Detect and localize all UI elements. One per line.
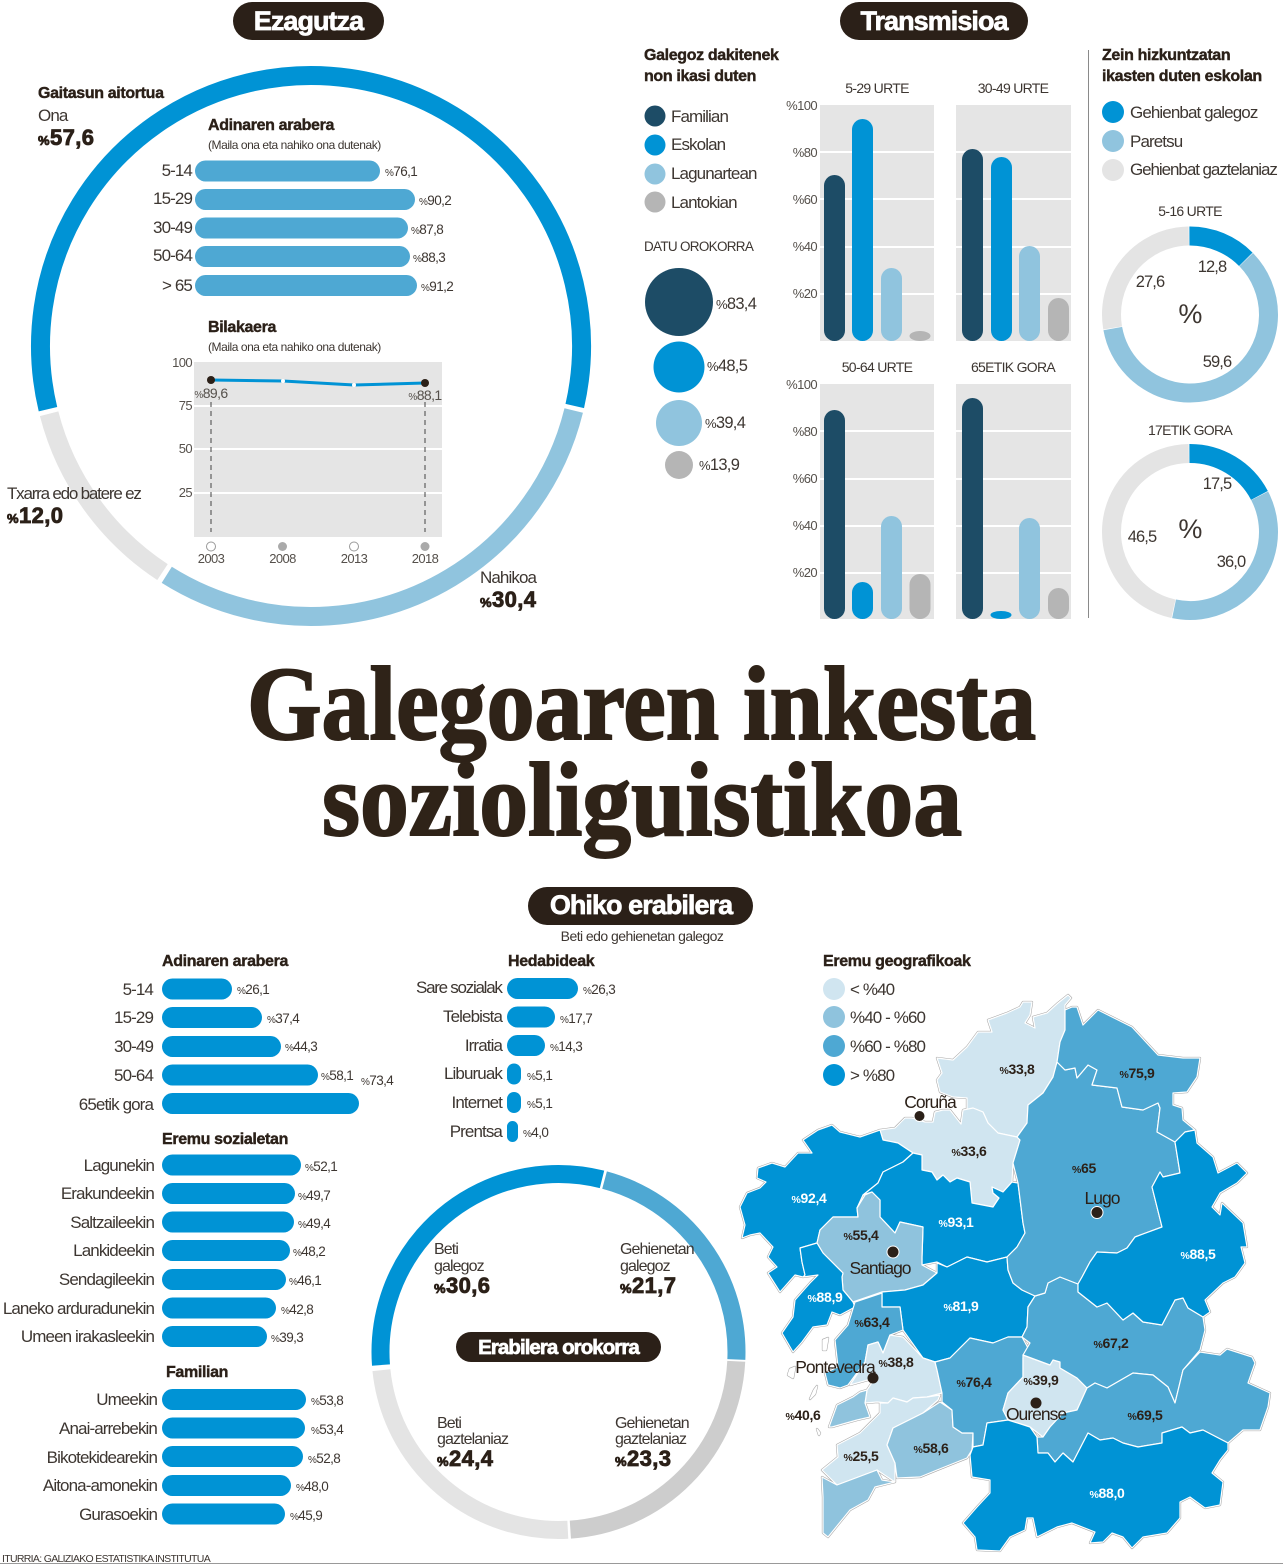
bar chart: 5-29 urte xyxy=(786,80,934,341)
panel: Transmisioa xyxy=(644,2,1283,638)
legend: Galegoz dakitenek non ikasi duten xyxy=(644,47,779,212)
legend: Eremu geografikoak: < %40 xyxy=(850,980,895,999)
bar chart: 5-29 urte: %40 xyxy=(793,239,817,254)
label: Gaitasun aitortua Ona: %57,6 xyxy=(38,125,94,150)
label: Gaitasun aitortua Ona xyxy=(38,85,164,150)
bar chart: Familian: %53,8 xyxy=(311,1393,343,1408)
bar chart: 50-64 urte: %20 xyxy=(793,565,817,580)
label: Beti galegoz: galegoz xyxy=(434,1258,485,1275)
bar chart: 50-64 urte: %60 xyxy=(793,471,817,486)
label: Gaitasun aitortua Ona: Gaitasun aitortua xyxy=(38,85,164,102)
bar chart: Eremu sozialetan: %49,7 xyxy=(298,1188,330,1203)
map values: %69,5 xyxy=(1127,1407,1163,1423)
label: Beti galegoz xyxy=(434,1241,490,1298)
bar chart: Adinaren arabera: 50-64 xyxy=(153,246,192,265)
bar chart: 5-29 urte: %20 xyxy=(793,286,817,301)
bar chart: Adinaren arabera: %26,1 xyxy=(237,982,269,997)
subtitle: Beti edo gehienetan galegoz xyxy=(561,928,724,944)
line chart: Bilakaera xyxy=(172,319,442,566)
bar chart: Hedabideak: Liburuak xyxy=(444,1064,503,1083)
heading pill: Ezagutza xyxy=(233,2,384,40)
donut: 17etik gora: 36,0 xyxy=(1217,553,1246,571)
bar chart: Adinaren arabera xyxy=(79,953,394,1114)
bar chart: Adinaren arabera: %76,1 xyxy=(385,164,417,179)
map city markers xyxy=(795,1092,1120,1424)
heading pill: Ezagutza: Ezagutza xyxy=(254,6,365,36)
map values: %65 xyxy=(1072,1160,1097,1176)
label: Nahikoa: %30,4 xyxy=(480,587,537,612)
bubble chart: Datu orokorra: %13,9 xyxy=(699,456,740,474)
map values xyxy=(785,1061,1216,1501)
label: Beti gaztelaniaz: Beti xyxy=(437,1415,461,1432)
map values: %55,4 xyxy=(843,1227,879,1243)
bar chart: Eremu sozialetan: %49,4 xyxy=(298,1216,331,1231)
label: Txarra edo batere ez: %12,0 xyxy=(7,503,63,528)
label: Gehienetan gaztelaniaz: gaztelaniaz xyxy=(615,1431,687,1448)
legend: Galegoz dakitenek non ikasi duten: Eskolan xyxy=(671,135,726,154)
bar chart: Eremu sozialetan: Lankideekin xyxy=(73,1241,154,1260)
bar chart: Familian: %45,9 xyxy=(290,1508,322,1523)
bar chart: Adinaren arabera: 30-49 xyxy=(114,1037,153,1056)
line chart: Bilakaera: 50 xyxy=(179,441,192,456)
bar chart: Hedabideak: Prentsa xyxy=(450,1122,503,1141)
bar chart: Adinaren arabera: 30-49 xyxy=(153,218,192,237)
legend: Eremu geografikoak: Eremu geografikoak xyxy=(823,953,971,970)
bar chart: Adinaren arabera: 50-64 xyxy=(114,1066,153,1085)
bar chart: Hedabideak: Telebista xyxy=(443,1007,503,1026)
legend: Eremu geografikoak: %40 - %60 xyxy=(850,1008,926,1027)
map values: %88,5 xyxy=(1180,1246,1216,1262)
bar chart: Adinaren arabera: %88,3 xyxy=(413,250,445,265)
map city markers: Lugo xyxy=(1085,1188,1120,1208)
source note: ITURRIA: GALIZIAKO ESTATISTIKA INSTITUTUA xyxy=(2,1553,211,1565)
map: Galicia regions xyxy=(740,995,1270,1551)
line chart: Bilakaera: Bilakaera xyxy=(208,319,276,336)
label: Beti gaztelaniaz: gaztelaniaz xyxy=(437,1431,509,1448)
bar chart: 50-64 urte xyxy=(786,359,934,619)
bar chart: Hedabideak: Irratia xyxy=(465,1036,503,1055)
map values: %81,9 xyxy=(943,1298,979,1314)
bar chart: Adinaren arabera: 5-14 xyxy=(162,161,192,180)
donut: 5-16 urte xyxy=(1079,203,1283,425)
bar chart: Adinaren arabera: %58,1 xyxy=(321,1068,353,1083)
heading pill: Transmisioa xyxy=(840,2,1028,40)
bar chart: Adinaren arabera: 5-14 xyxy=(123,980,153,999)
bar chart: Adinaren arabera: %90,2 xyxy=(419,193,451,208)
bar chart: Adinaren arabera: (Maila ona eta nahiko ona dutenak) xyxy=(208,138,381,152)
bar chart: Adinaren arabera: 15-29 xyxy=(153,189,192,208)
bar chart: Adinaren arabera: 65etik gora xyxy=(79,1095,154,1114)
bar chart: Familian: Umeekin xyxy=(96,1390,157,1409)
bar chart: Adinaren arabera: %44,3 xyxy=(285,1039,317,1054)
label: Gehienetan gaztelaniaz xyxy=(615,1415,689,1471)
map city markers: Ourense xyxy=(1006,1404,1066,1424)
legend: Zein hizkuntzatan ikasten duten eskolan: Paretsu xyxy=(1130,132,1183,151)
bar chart: Familian xyxy=(43,1364,344,1524)
bar chart: Familian: Aitona-amonekin xyxy=(43,1476,157,1495)
bar chart: 5-29 urte: 5-29 URTE xyxy=(845,80,909,96)
label: Txarra edo batere ez: Txarra edo batere ez xyxy=(7,484,141,503)
bar chart: Hedabideak: %4,0 xyxy=(523,1125,548,1140)
map values: %33,8 xyxy=(999,1061,1035,1077)
bar chart: Adinaren arabera: Adinaren arabera xyxy=(208,117,334,134)
title xyxy=(247,645,1036,858)
label: Gehienetan gaztelaniaz: Gehienetan xyxy=(615,1415,689,1432)
map values: %75,9 xyxy=(1119,1065,1155,1081)
legend: Galegoz dakitenek non ikasi duten: Lantokian xyxy=(671,193,737,212)
title: sozioliguistikoa xyxy=(322,741,962,858)
label: Beti galegoz: Beti xyxy=(434,1241,458,1258)
bar chart: Adinaren arabera: > 65 xyxy=(162,276,192,295)
bar chart: Eremu sozialetan xyxy=(3,1131,337,1347)
bubble chart: Datu orokorra: %39,4 xyxy=(705,414,746,432)
line chart: Bilakaera: 75 xyxy=(179,398,192,413)
bar chart: Familian: %48,0 xyxy=(296,1479,328,1494)
map values: %39,9 xyxy=(1023,1372,1059,1388)
bar chart: 50-64 urte: %80 xyxy=(793,424,817,439)
legend: Zein hizkuntzatan ikasten duten eskolan: Zein hizkuntzatan xyxy=(1102,47,1230,64)
line chart: Bilakaera: 2008 xyxy=(269,551,296,566)
heading pill: Ohiko erabilera xyxy=(528,887,753,925)
bar chart: Hedabideak: %5,1 xyxy=(527,1096,552,1111)
bar chart: Hedabideak: %17,7 xyxy=(560,1011,592,1026)
legend: Zein hizkuntzatan ikasten duten eskolan: ikasten duten eskolan xyxy=(1102,68,1262,85)
pill: Erabilera orokorra xyxy=(456,1332,661,1362)
map values: %38,8 xyxy=(878,1354,914,1370)
bar chart: 5-29 urte: %80 xyxy=(793,145,817,160)
bar chart: Familian: Anai-arrebekin xyxy=(59,1419,157,1438)
map values: %67,2 xyxy=(1093,1335,1129,1351)
bar chart: Hedabideak xyxy=(416,953,615,1142)
label: Nahikoa xyxy=(480,568,538,612)
legend: Galegoz dakitenek non ikasi duten: Lagunartean xyxy=(671,164,757,183)
line chart: Bilakaera: 2013 xyxy=(341,551,368,566)
bar chart: Eremu sozialetan: Laneko arduradunekin xyxy=(3,1299,154,1318)
label: Gehienetan galegoz: Gehienetan xyxy=(620,1241,694,1258)
bar chart: Familian: %53,4 xyxy=(311,1422,344,1437)
legend: Zein hizkuntzatan ikasten duten eskolan xyxy=(1088,47,1277,618)
bar chart: 30-49 urte xyxy=(956,80,1071,341)
bar chart: Familian: Bikotekidearekin xyxy=(47,1448,157,1467)
bar chart: Hedabideak: %5,1 xyxy=(527,1068,552,1083)
bar chart: Hedabideak: Sare sozialak xyxy=(416,978,503,997)
bar chart: 50-64 urte: %100 xyxy=(786,377,817,392)
line chart: Bilakaera: %88,1 xyxy=(408,387,442,403)
heading pill: Ohiko erabilera: Ohiko erabilera xyxy=(550,890,734,920)
bar chart: Hedabideak: Hedabideak xyxy=(508,953,595,970)
map values: %63,4 xyxy=(854,1314,890,1330)
bar chart: Adinaren arabera: %37,4 xyxy=(267,1011,300,1026)
label: Gehienetan galegoz: galegoz xyxy=(620,1258,671,1275)
label: Nahikoa: Nahikoa xyxy=(480,568,538,587)
bar chart: Adinaren arabera: 15-29 xyxy=(114,1008,153,1027)
bar chart: Eremu sozialetan: Saltzaileekin xyxy=(70,1213,154,1232)
map values: %76,4 xyxy=(956,1374,992,1390)
heading pill: Transmisioa: Transmisioa xyxy=(860,6,1009,36)
bar chart: Adinaren arabera: %73,4 xyxy=(361,1073,394,1088)
map values: %58,6 xyxy=(913,1440,949,1456)
line chart: Bilakaera: (Maila ona eta nahiko ona dutenak) xyxy=(208,340,381,354)
line chart: Bilakaera: 2003 xyxy=(198,551,225,566)
donut: 5-16 urte: 5-16 URTE xyxy=(1158,203,1222,219)
bar chart: Eremu sozialetan: Eremu sozialetan xyxy=(162,1131,288,1148)
bar chart: Eremu sozialetan: %42,8 xyxy=(281,1302,313,1317)
pill: Erabilera orokorra: Erabilera orokorra xyxy=(478,1336,640,1359)
map values: %40,6 xyxy=(785,1407,821,1423)
bar chart: Eremu sozialetan: %52,1 xyxy=(305,1159,337,1174)
bar chart: Hedabideak: %26,3 xyxy=(583,982,615,997)
donut: 5-16 urte: 27,6 xyxy=(1136,273,1165,291)
map values: %93,1 xyxy=(938,1214,974,1230)
donut: 5-16 urte: % xyxy=(1178,299,1202,329)
bar chart: Familian: Gurasoekin xyxy=(79,1505,157,1524)
legend: Zein hizkuntzatan ikasten duten eskolan: Gehienbat galegoz xyxy=(1130,103,1258,122)
bar chart: 5-29 urte: %100 xyxy=(786,98,817,113)
bar chart: 50-64 urte: %40 xyxy=(793,518,817,533)
map values: %33,6 xyxy=(951,1143,987,1159)
label: Beti gaztelaniaz: %24,4 xyxy=(437,1446,494,1471)
map values: %25,5 xyxy=(843,1448,879,1464)
bar chart: 30-49 urte: 30-49 URTE xyxy=(978,80,1049,96)
label: Gehienetan galegoz xyxy=(620,1241,694,1298)
bar chart: Hedabideak: Internet xyxy=(452,1093,503,1112)
bar chart: Familian: %52,8 xyxy=(308,1451,340,1466)
donut: 5-16 urte: 12,8 xyxy=(1198,258,1227,276)
panel: Ezagutza xyxy=(0,0,686,721)
label: Beti galegoz: %30,6 xyxy=(434,1273,490,1298)
line chart: Bilakaera: 2018 xyxy=(412,551,439,566)
bar chart: Eremu sozialetan: Sendagileekin xyxy=(59,1270,154,1289)
donut ring: declared ability xyxy=(0,0,686,721)
legend: Zein hizkuntzatan ikasten duten eskolan: Gehienbat gaztelaniaz xyxy=(1130,160,1277,179)
bar chart: Eremu sozialetan: %39,3 xyxy=(271,1330,303,1345)
label: Gaitasun aitortua Ona: Ona xyxy=(38,106,69,125)
bar chart: 5-29 urte: %60 xyxy=(793,192,817,207)
donut: 17etik gora: % xyxy=(1178,514,1202,544)
bar chart: Adinaren arabera xyxy=(153,117,453,296)
legend: Eremu geografikoak xyxy=(823,953,971,1086)
line chart: Bilakaera: 100 xyxy=(172,355,192,370)
bar chart: Eremu sozialetan: %48,2 xyxy=(293,1244,325,1259)
donut: 17etik gora xyxy=(1084,422,1283,638)
bar chart: Eremu sozialetan: Umeen irakasleekin xyxy=(21,1327,154,1346)
bar chart: 50-64 urte: 50-64 URTE xyxy=(842,359,913,375)
bubble chart: Datu orokorra: %83,4 xyxy=(716,295,757,313)
map values: %88,9 xyxy=(807,1289,843,1305)
label: Gehienetan gaztelaniaz: %23,3 xyxy=(615,1446,671,1471)
line chart: Bilakaera: %89,6 xyxy=(194,385,228,401)
map city markers: Coruña xyxy=(904,1092,957,1112)
map values: %92,4 xyxy=(791,1190,827,1206)
legend: Galegoz dakitenek non ikasi duten: Galegoz dakitenek xyxy=(644,47,779,64)
bar chart: Eremu sozialetan: %46,1 xyxy=(289,1273,321,1288)
legend: Eremu geografikoak: %60 - %80 xyxy=(850,1037,926,1056)
bar chart: Hedabideak: %14,3 xyxy=(550,1039,582,1054)
legend: Eremu geografikoak: > %80 xyxy=(850,1066,895,1085)
label: Txarra edo batere ez xyxy=(7,484,141,528)
map city markers: Pontevedra xyxy=(795,1357,876,1377)
bubble chart: Datu orokorra: DATU OROKORRA xyxy=(644,239,754,254)
bar chart: Adinaren arabera: Adinaren arabera xyxy=(162,953,288,970)
legend: Galegoz dakitenek non ikasi duten: non ikasi duten xyxy=(644,68,756,85)
map city markers: Santiago xyxy=(849,1258,911,1278)
donut ring: Erabilera orokorra xyxy=(340,1134,777,1565)
bar chart: Adinaren arabera: %87,8 xyxy=(411,222,443,237)
bar chart: 65etik gora: 65ETIK GORA xyxy=(971,359,1056,375)
donut: 17etik gora: 17ETIK GORA xyxy=(1148,422,1233,438)
donut: 17etik gora: 17,5 xyxy=(1203,475,1232,493)
line chart: Bilakaera: 25 xyxy=(179,485,192,500)
bar chart: 65etik gora xyxy=(956,359,1071,619)
title: Galegoaren inkesta xyxy=(247,645,1036,762)
legend: Galegoz dakitenek non ikasi duten: Familian xyxy=(671,107,728,126)
donut: 5-16 urte: 59,6 xyxy=(1203,353,1232,371)
bubble chart: Datu orokorra xyxy=(644,239,757,479)
donut: 17etik gora: 46,5 xyxy=(1128,528,1157,546)
bar chart: Familian: Familian xyxy=(166,1364,228,1381)
map values: %88,0 xyxy=(1089,1485,1125,1501)
bar chart: Eremu sozialetan: Erakundeekin xyxy=(61,1184,154,1203)
label: Beti gaztelaniaz xyxy=(437,1415,509,1471)
bar chart: Eremu sozialetan: Lagunekin xyxy=(84,1156,154,1175)
panel: Ohiko erabilera xyxy=(3,887,1270,1565)
bar chart: Adinaren arabera: %91,2 xyxy=(421,279,453,294)
bubble chart: Datu orokorra: %48,5 xyxy=(707,357,748,375)
label: Gehienetan galegoz: %21,7 xyxy=(620,1273,676,1298)
